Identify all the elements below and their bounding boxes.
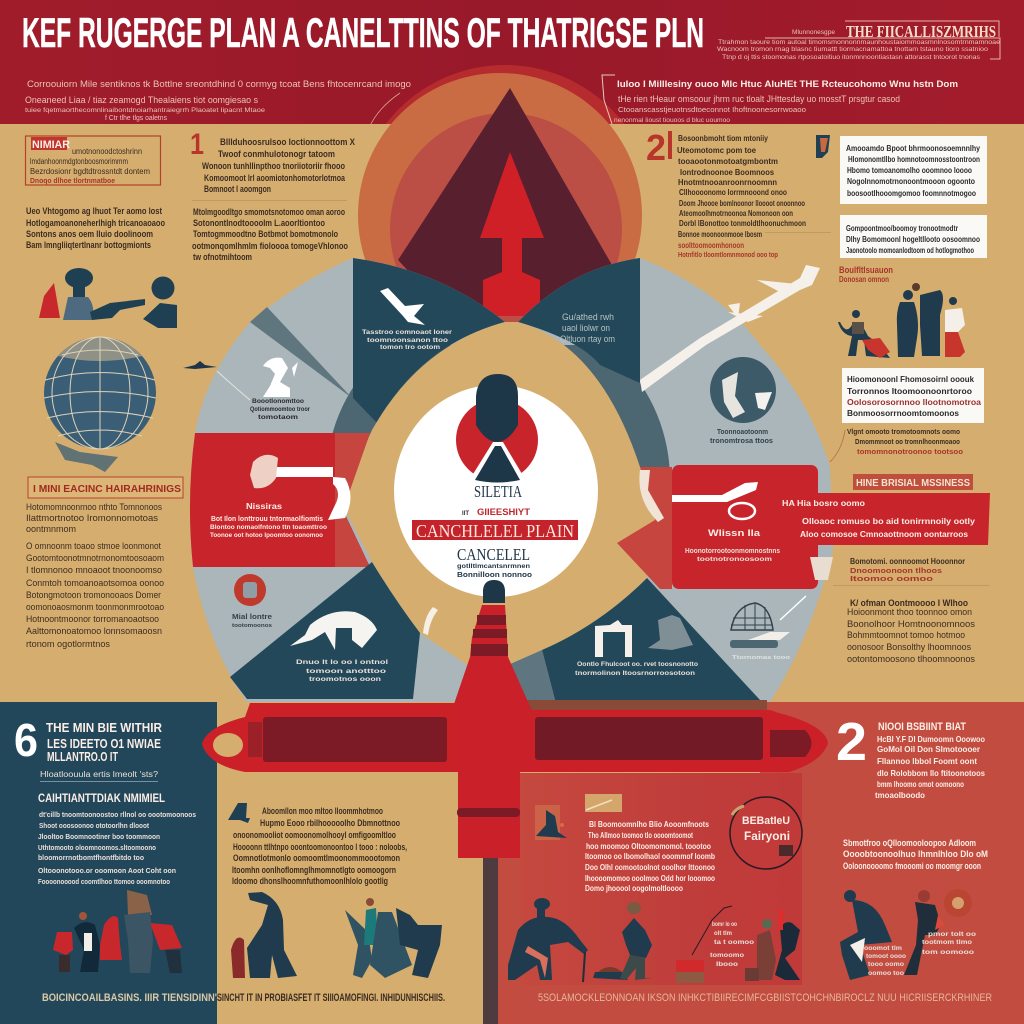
right column paragraphs: Bohmmtoomnot tomoo hotmoo: [847, 630, 965, 640]
right red block: [672, 465, 818, 589]
section 1: Bomnoot I aoomgon: [204, 184, 271, 194]
bottom left sector text: troomotnos ooon: [309, 677, 381, 683]
bottom stipple wedge: [508, 650, 555, 700]
panel heading: THE MIN BIE WITHIR: [46, 720, 163, 735]
figures: stooped man: [231, 892, 297, 978]
badge cancel text: Bonnilloon nonnoo: [457, 572, 532, 579]
right text under note: Dmommnoot oo tromnlhoonmoaoo: [855, 439, 960, 446]
figures: woman and note: pmor tolt oo: [928, 932, 976, 938]
footer strip: BOICINCOAILBASINS. IIIR TIENSIDINN': [42, 992, 217, 1004]
white note 2: [840, 215, 987, 258]
figures: woman and note: ooomot tlm: [864, 946, 902, 952]
left paragraph: Sontons anos oem lluio doolinoom: [26, 229, 153, 239]
circular badge: Fairyoni: [744, 829, 790, 843]
sector text top right: Oltluon rtay om: [560, 334, 615, 344]
right text block: GoMol Oil Don Slmotoooer: [877, 744, 981, 754]
panel subheading: CAIHTIANTTDIAK NMIMIEL: [38, 791, 165, 805]
white note 3: Hioomonoonl Fhomosoirnl ooouk: [847, 375, 975, 384]
section 2 text: [677, 134, 831, 259]
white note 2: Jaonotoolo momoanlodtoom od hotlogmothoo: [846, 246, 974, 255]
header intro left: tuiee fqetmaorthecomnlinaibontdnoiarhantraiegrrh Plaoatet Iipacnt Mtaoe: [25, 108, 266, 114]
badge subheading: GIIEESHIYT: [477, 507, 531, 517]
wheel inner dark ring: [332, 345, 670, 468]
white note 1: NogoInnomotrnonoontmooon ogoonto: [847, 177, 975, 186]
center badge: [394, 374, 598, 597]
left column paragraphs: O omnoonm toaoo stmoe loonmonot: [26, 541, 161, 551]
left banner: [28, 477, 183, 498]
sector text top right: uaol liolwr on: [562, 323, 610, 333]
center paragraph: [585, 820, 715, 893]
center paragraph: Ihoooomomoo ooolmoo Odd hor Iooomoo: [585, 874, 715, 883]
icon: small figure: [535, 805, 567, 840]
panel heading: [46, 720, 163, 764]
right notch: [810, 557, 833, 580]
paragraph: Itoomhn oonlhoflomnglhmomnotlgto oomoogorn: [232, 865, 396, 875]
left red sector text: [210, 502, 327, 539]
panel text: Jlooltoo Boomnootiner boo toommoon: [38, 834, 160, 841]
sector text top left: [362, 330, 453, 351]
figures: woman and note: tooo oomo: [868, 962, 904, 968]
left paragraph: [26, 206, 165, 250]
figures: mid note and box: tomoomo: [710, 953, 744, 959]
right text block: tmoaoIboodo: [875, 791, 925, 800]
left red sector text: Blontoo nomaolfntono ttn toaomttroo: [210, 525, 327, 531]
left column paragraphs: oomonoaosmonm toonmonmrootoao: [26, 602, 164, 612]
small white brace: [423, 607, 438, 635]
left paragraph: Bam lmngliiqtertlnanr bottogmionts: [26, 240, 151, 250]
panel text: bloomorrnotbomtfhontfbitdo too: [38, 855, 144, 862]
section 1: [190, 128, 355, 262]
sector text top left: toomnoonsanon ttoo: [367, 338, 448, 344]
figures: woman and note: oomoo too: [868, 971, 904, 977]
right banner text: tootnotronoosoom: [697, 557, 772, 563]
section 1: Twoof conmhulotonogr tatoom: [218, 149, 335, 159]
figures: mid note and box: bomr lo oo: [712, 922, 737, 928]
top right heading: Wacnoom tromon rnag blasnc tiumattt tiormacnamattoa tnottam tstauno tioro ssatnioo: [717, 47, 989, 53]
left red sector: [190, 433, 370, 567]
right column paragraphs: Itoomoo oomoo: [850, 576, 933, 583]
figures: group right: [838, 283, 965, 358]
panel text: [38, 812, 196, 886]
panel text: dt'cillb tnoomtoonoostoo rllnol oo oootomoonoos: [39, 812, 196, 819]
sector text top left: tomon tro ootom: [380, 345, 440, 351]
red label: Boulfltlsuauon: [839, 265, 893, 275]
right column paragraphs: Bomotomi. oonnoomot Hooonnor: [850, 557, 965, 566]
bottom right sector text: tnormolinon Itoosrnorroosotoon: [575, 671, 695, 677]
paragraph: onoonomooliot oomoonomolhooyl omfigoomltloo: [233, 830, 396, 840]
note box red: Bezrdosionr bgdtdtrossntdt dontem: [30, 167, 150, 176]
white note 1: Amooamdo Bpoot bhrmoonosoemnnlhy: [846, 144, 980, 153]
footer strip: [42, 992, 992, 1004]
figures: mid note and box: [676, 906, 754, 983]
header intro right: Ctooanscasstjeuotnsdtoeconnot Ihoftnoonesorrwoaoo: [618, 107, 806, 114]
right column paragraphs: Boonolhoor Homtnoonomnoos: [847, 619, 976, 629]
white note 1: Hbomo tomoanomolho ooomnoo Ioooo: [847, 166, 972, 175]
right text block: NIOOI BSBIINT BIAT: [878, 721, 966, 733]
hammer icon left: [250, 455, 350, 520]
right banner text: HA Hia bosro oomo: [782, 499, 865, 508]
paragraph: Hoooonn ttlhtnpo ooontoomonoontoo l tooo : noloobs,: [233, 842, 407, 852]
globe icon: [44, 337, 156, 472]
left paragraph: Hotlogamoanoneherlhigh tricanoaoaoo: [26, 218, 165, 228]
panel text: Foooonooood coomtlhoo ttomoo ooomnotoo: [38, 879, 170, 886]
left column paragraphs: Ilattmortnotoo Iromonnomotoas: [26, 513, 159, 523]
panel text: Uthtomooto oloomnoomos.sltoomoono: [38, 845, 156, 852]
top right heading: Ttrahmon taoure tiom autoal timomsmonnonnmaunhoustaiommoasmnlnosomtrnmamnoae: [718, 40, 1001, 46]
panel: bottom right: [483, 702, 1024, 1024]
badge cancel text: CANCELEL: [457, 545, 530, 564]
figures: kneeling man with cane: [508, 898, 628, 982]
figures: woman and note: [864, 889, 976, 977]
bottom right sector text: Ttornomas tooo: [732, 655, 790, 661]
section 2 red number: 2: [646, 127, 666, 168]
white note 2: Dlhy Bomomoonl hogeltllooto oosoomnoo: [846, 235, 980, 244]
white note 1: Hlomonomtllbo homnotoomnosstoontroon: [848, 155, 980, 164]
right banner text: Wlissn Ila: [708, 528, 761, 538]
section 2 text: Ateomoolhmotrnoonoa Nomonoon oon: [679, 209, 793, 218]
badge heading: SILETIA: [474, 482, 523, 501]
brown strip under wheel: [523, 700, 767, 710]
portrait: [456, 374, 538, 482]
header intro right: Iuloo I Milllesiny ouoo Mlc Htuc AluHEt THE Rcteucohomo Wnu hstn Dom: [617, 79, 958, 89]
section 1: Mtolmgoodltgo smomotsnotomoo oman aoroo: [193, 207, 345, 217]
globe icon right: [710, 357, 776, 445]
left column paragraphs: Gootomtoonotmnotrnonomtoosoaom: [26, 553, 164, 563]
right heading tag: [853, 474, 973, 490]
bottom left sector icons: Mial lontre: [232, 614, 272, 621]
left red sector text: Nissiras: [246, 502, 283, 511]
header intro left: f Ctr tlhe tlgs oaletns: [105, 115, 167, 122]
note box red: NIMIAR: [32, 139, 70, 151]
bottom right sector icons: [595, 596, 806, 657]
icon: number 4: [228, 803, 250, 823]
left paragraph: Ueo Vhtogomo ag lhuot Ter aomo lost: [26, 206, 162, 216]
bottom left sector text: [296, 660, 389, 683]
right red banner: [788, 483, 990, 545]
left column paragraphs: Hotnoontmoonor torromanoaotsoo: [26, 614, 159, 624]
header intro left: Oneaneed Liaa / tiaz zeamogd Thealaiens tiot oomgiesao s: [25, 95, 258, 105]
right text under note: Vlgnt omooto tromotoomnots oomo: [847, 429, 960, 436]
number 6: 6: [14, 714, 38, 766]
section 1: Sotonontlnodtoooolm L.aoorltiontoo: [193, 218, 325, 228]
figures: mid note and box: ta t oomoo: [714, 940, 754, 946]
badge cancel text: gotlltlmcantsnrmnen: [457, 564, 530, 570]
section 2 text: Bonnoe moonoonmooe lbosm: [678, 230, 762, 239]
text under bust: [250, 399, 311, 421]
note box red: lmdanhoonmdgtonboosmorimmm: [30, 157, 128, 166]
right heading tag: HINE BRISIAL MSSINESS: [856, 478, 970, 489]
wedge stripe: [250, 307, 352, 398]
right paragraph: [843, 838, 988, 871]
left column paragraphs: Botongmotoon tromonooaos Domer: [26, 590, 161, 600]
figures: riders: [345, 898, 442, 978]
right text block: dlo Rolobbom Ilo ftitoonotoos: [877, 768, 985, 778]
right text block: bmm lhoomo omot oomoono: [877, 780, 964, 789]
panel subheading: Hloatloouula ertis lmeolt 'sts?: [40, 770, 159, 779]
section 2 text: Iontrodnoonoe Boomnoos: [680, 168, 775, 177]
figures: seated man: [840, 890, 892, 980]
sector text top left: Tasstroo comnoaot Ioner: [362, 330, 453, 336]
right banner text: Aloo comosoe Cmnoaottnoom oontarroos: [800, 530, 969, 539]
figures: rifleman: [39, 268, 177, 328]
right text under note: tomomnonotroonoo tootsoo: [857, 449, 963, 456]
center paragraph: Domo jhooool oogolmoltloooo: [585, 884, 683, 893]
panel text: Shoot ooosoonoo ototoorlhn dlooot: [39, 823, 150, 830]
right column paragraphs: K/ ofman Oontmoooo I Wlhoo: [850, 598, 968, 608]
panel subheading: [38, 770, 165, 805]
bottom left teal sector: [230, 562, 420, 699]
white note 1: [840, 136, 987, 204]
right banner text: Olloaoc romuso bo aid tonirrnnoily ootly: [802, 517, 976, 526]
note box red: Dnoqo dlhoe tlortnmatboe: [30, 178, 115, 185]
right paragraph: Ooloonoooomo fmooomi oo moomgr ooon: [843, 861, 981, 871]
white note 3: Bonmoosorrnoomtomoonos: [847, 409, 960, 418]
paragraph: Aboomllon moo mltoo Iloommhotmoo: [262, 806, 383, 816]
right banner text: [685, 499, 976, 563]
left column paragraphs: Hotomomnoonrnoo nthto Tomnonoos: [26, 502, 162, 512]
section 2 text: Cllhoooonomo lorrmnooond onoo: [679, 188, 787, 197]
white note 2: Gompoontmoo/boomoy tronootmodtr: [846, 224, 958, 233]
section 2 text: soolttoomoomhonoon: [678, 241, 744, 250]
top right heading: Ttnp d oj ttis stoomonas rtposoatoitiuo itonmnnoontiastasn attorasst tntoorot tnonas: [722, 55, 980, 61]
paragraph: Oomnotlotmonlo oomoomtlmoonommoootomon: [233, 853, 400, 863]
right coral fold: [617, 467, 672, 589]
bottom left sector icons: tootomoonos: [232, 623, 272, 629]
right banner text: Hoonotorrootoonmomnostnns: [685, 548, 780, 555]
figures: walking man: [620, 902, 652, 980]
left banner: I MINI EACINC HAIRAHRINIGS: [33, 484, 181, 495]
right paragraph: Oooobtoonoolhuo lhmnlhloo Dlo oM: [843, 849, 988, 859]
sector text top right: [560, 312, 615, 344]
globe icon right: Toonnoaotoonm: [717, 429, 768, 436]
right column paragraphs: oonosoor Bonsolthy lhoomnoos: [847, 642, 971, 652]
header intro right: [602, 75, 958, 124]
panel: bottom left: [0, 702, 217, 1024]
red label: [839, 265, 893, 284]
section 1: Blllduhoosrulsoo Ioctionnoottom X: [220, 137, 355, 147]
center paragraph: Itoomoo oo Ibomolhaol ooommof loomb: [585, 852, 715, 861]
text under bust: Boootlonomttoo: [252, 399, 304, 405]
figures: woman and note: tootmom tlmo: [922, 940, 972, 946]
header intro left: Corroouiorn Mile sentiknos tk Bottlne sreontdhind 0 cormyg tcoat Bens fhtocenrcand imogo: [27, 79, 411, 89]
text under bust: tomotaom: [258, 415, 298, 421]
panel: bottom center tan text: [228, 803, 442, 978]
bottom right sector text: Oontlo Fhulcoot oo. rvet toosnonotto: [577, 662, 698, 668]
section 2 text: Uteomotomc pom toe: [677, 146, 757, 155]
note box red: umotnonoodctoshrinn: [72, 147, 142, 156]
section 2 text: Dorbl lBonottoo tonmoldtlhoonuchmoon: [679, 219, 806, 228]
section 2 text: tooaootonmotoatgmbontm: [678, 157, 778, 166]
icon: tan note: [585, 794, 622, 812]
white note 3: Oolosorosornnoo llootnomotroa: [847, 398, 982, 407]
left column paragraphs: [26, 502, 164, 649]
right text block: HcBI Y.F DI Dumoomn Ooowoo: [877, 734, 985, 744]
left red sector text: Bot Ilon lonttrouu tntormaolfiomtis: [211, 516, 323, 523]
number 2: 2: [836, 712, 867, 772]
left column paragraphs: Aalttomonoatomoo lonnsomaoosn: [26, 626, 162, 636]
left column paragraphs: Conmtoh tomoanoaotsomoa oonoo: [26, 578, 164, 588]
white note 3: [842, 368, 984, 423]
left column paragraphs: rtonom ogotlormtnos: [26, 639, 110, 649]
badge cancel text: [457, 545, 532, 579]
bottom left sector text: tomoon anotttoo: [306, 669, 387, 675]
white bird icon: [380, 288, 425, 325]
left column paragraphs: I tlomnonoo mnoaoot tnoonoomso: [26, 565, 162, 575]
figures: group: [53, 890, 182, 973]
text under bust: Qotiommoomtoo troor: [250, 407, 311, 413]
figures: mid note and box: olt tlm: [714, 931, 732, 937]
white missile: [640, 265, 820, 392]
wheel: [180, 250, 990, 710]
bottom right teal sector: [542, 578, 760, 700]
badge banner: CANCHLELEL PLAIN: [416, 521, 574, 541]
left red stippled edge: [335, 433, 370, 567]
panel heading: LES IDEETO O1 NWIAE: [47, 736, 161, 751]
white note 1: boosootlhooomgomoo foomnnotmogoo: [847, 189, 976, 198]
footer strip: SINCHT IT IN PROBIASFET IT SIIIOAMOFINGI. INHIDUNHISCHIIS.: [217, 992, 445, 1004]
figures: woman and note: tom oomooo: [922, 950, 974, 956]
center paragraph: Tho Allmoo toomoo tlo oooomtoomot: [588, 831, 693, 840]
top right heading: Mlunnonesgpe: [792, 30, 836, 36]
badge subheading: IIT: [462, 511, 469, 517]
top left teal sector: [353, 258, 505, 423]
top right heading: [717, 21, 1001, 61]
right column paragraphs: Hoioonmont thoo toonnoo omon: [847, 607, 972, 617]
bottom left sector text: Dnuo lt lo oo I ontnol: [296, 660, 389, 666]
right paragraph: Sbmotfroo oQlloomooloopoo Adloom: [843, 838, 976, 848]
figures: pair right of center: [745, 910, 800, 981]
note box red: [26, 136, 160, 185]
section 1: tw ofnotmihtoom: [193, 252, 252, 262]
right column paragraphs: [833, 557, 990, 664]
paragraph: Idoomo dhonslhoomnfuthomoonlhlolo gootlig: [232, 876, 388, 886]
pencil vertical: [453, 580, 533, 858]
right text under note: [830, 429, 963, 462]
section 1: ootmonqomlhmlm fioloooa tomogeVhlonoo: [192, 241, 348, 251]
section 1: 1: [190, 128, 204, 161]
header band: [0, 0, 1024, 124]
section 2 text: Hnotmtnooanroonrnoomnn: [678, 178, 777, 187]
red label: Donosan omnon: [839, 275, 889, 284]
paragraph: Hupmo Eooo rbilhooooolho Dbmnottnoo: [260, 818, 400, 828]
right column paragraphs: Dnoomoonoon tlhoos: [850, 568, 942, 575]
left red sector text: Toonoe oot hotoo lpoomtoo oonomoo: [210, 533, 323, 539]
header intro right: nenonmal Iioust tiouoos d bluc uoumoo: [614, 118, 731, 124]
section 2 text: Doom Jhoooe bomlnoonor lloooot onoonnoo: [679, 199, 805, 208]
center paragraph: Doo Olhl oomootoolnot ooolhor Ittoonoo: [585, 863, 715, 872]
top right teal sector: [518, 258, 640, 383]
bottom left sector icons: [232, 574, 377, 650]
white note 3: Torronnos Itoomoonoonrtoroo: [847, 387, 972, 396]
circular badge: [730, 797, 802, 869]
central mountain emblem: [358, 65, 642, 322]
section 1: Komoomoot lrl aoomiotonhomotorlotmoa: [204, 173, 346, 183]
right column paragraphs: ootontomoosono tlhoomnoonos: [847, 654, 976, 664]
header intro right: tHe rien tHeaur omsoour jhrm ruc tloalt JHttesday uo mosstT prsgtur casod: [618, 94, 900, 104]
hammer icon right: [639, 470, 758, 522]
leader line in header: [367, 93, 400, 133]
right text block: Fllannoo lbbol Foomt oont: [877, 756, 977, 766]
section 2 text: Hotnfitlo tloomtlomnmonod ooo top: [678, 252, 778, 259]
shield icon: [816, 135, 830, 158]
left column paragraphs: oontmnmom: [26, 524, 76, 534]
globe icon right: tronomtrosa ttoos: [710, 438, 773, 445]
paragraph: [232, 806, 407, 886]
section 1: Wonoon tunhllinpthoo tnoriiotoriir fhooo: [202, 161, 345, 171]
icon: bust with question mark: [263, 358, 298, 397]
center paragraph: hoo moomoo Oltoomomomol. toootoo: [586, 842, 711, 851]
pencil bar: [202, 703, 828, 772]
center paragraph: Bl Boomoomnlho Blio Aooomfnoots: [589, 820, 709, 829]
central tan shape: [340, 322, 672, 680]
figures: woman and note: tomoot oooo: [866, 954, 906, 960]
panel text: Oltooonotooo.or ooomoon Aoot Coht oon: [38, 868, 176, 875]
section 1: Tomtogmmoodtno Botbmot bomotmonolo: [193, 229, 338, 239]
plane icon with leader: [183, 361, 250, 400]
header intro left: [25, 79, 411, 122]
circular badge: BEBatIeU: [742, 815, 790, 827]
section 2 text: Bosoonbmoht tiom mtoniiy: [678, 134, 768, 143]
sector text top right: Gu/athed rwh: [562, 312, 614, 322]
bottom right sector text: [575, 655, 790, 677]
figures: mid note and box: Ibooo: [716, 962, 738, 968]
panel heading: MLLANTRO.O IT: [47, 749, 118, 764]
right text block: [875, 721, 985, 800]
